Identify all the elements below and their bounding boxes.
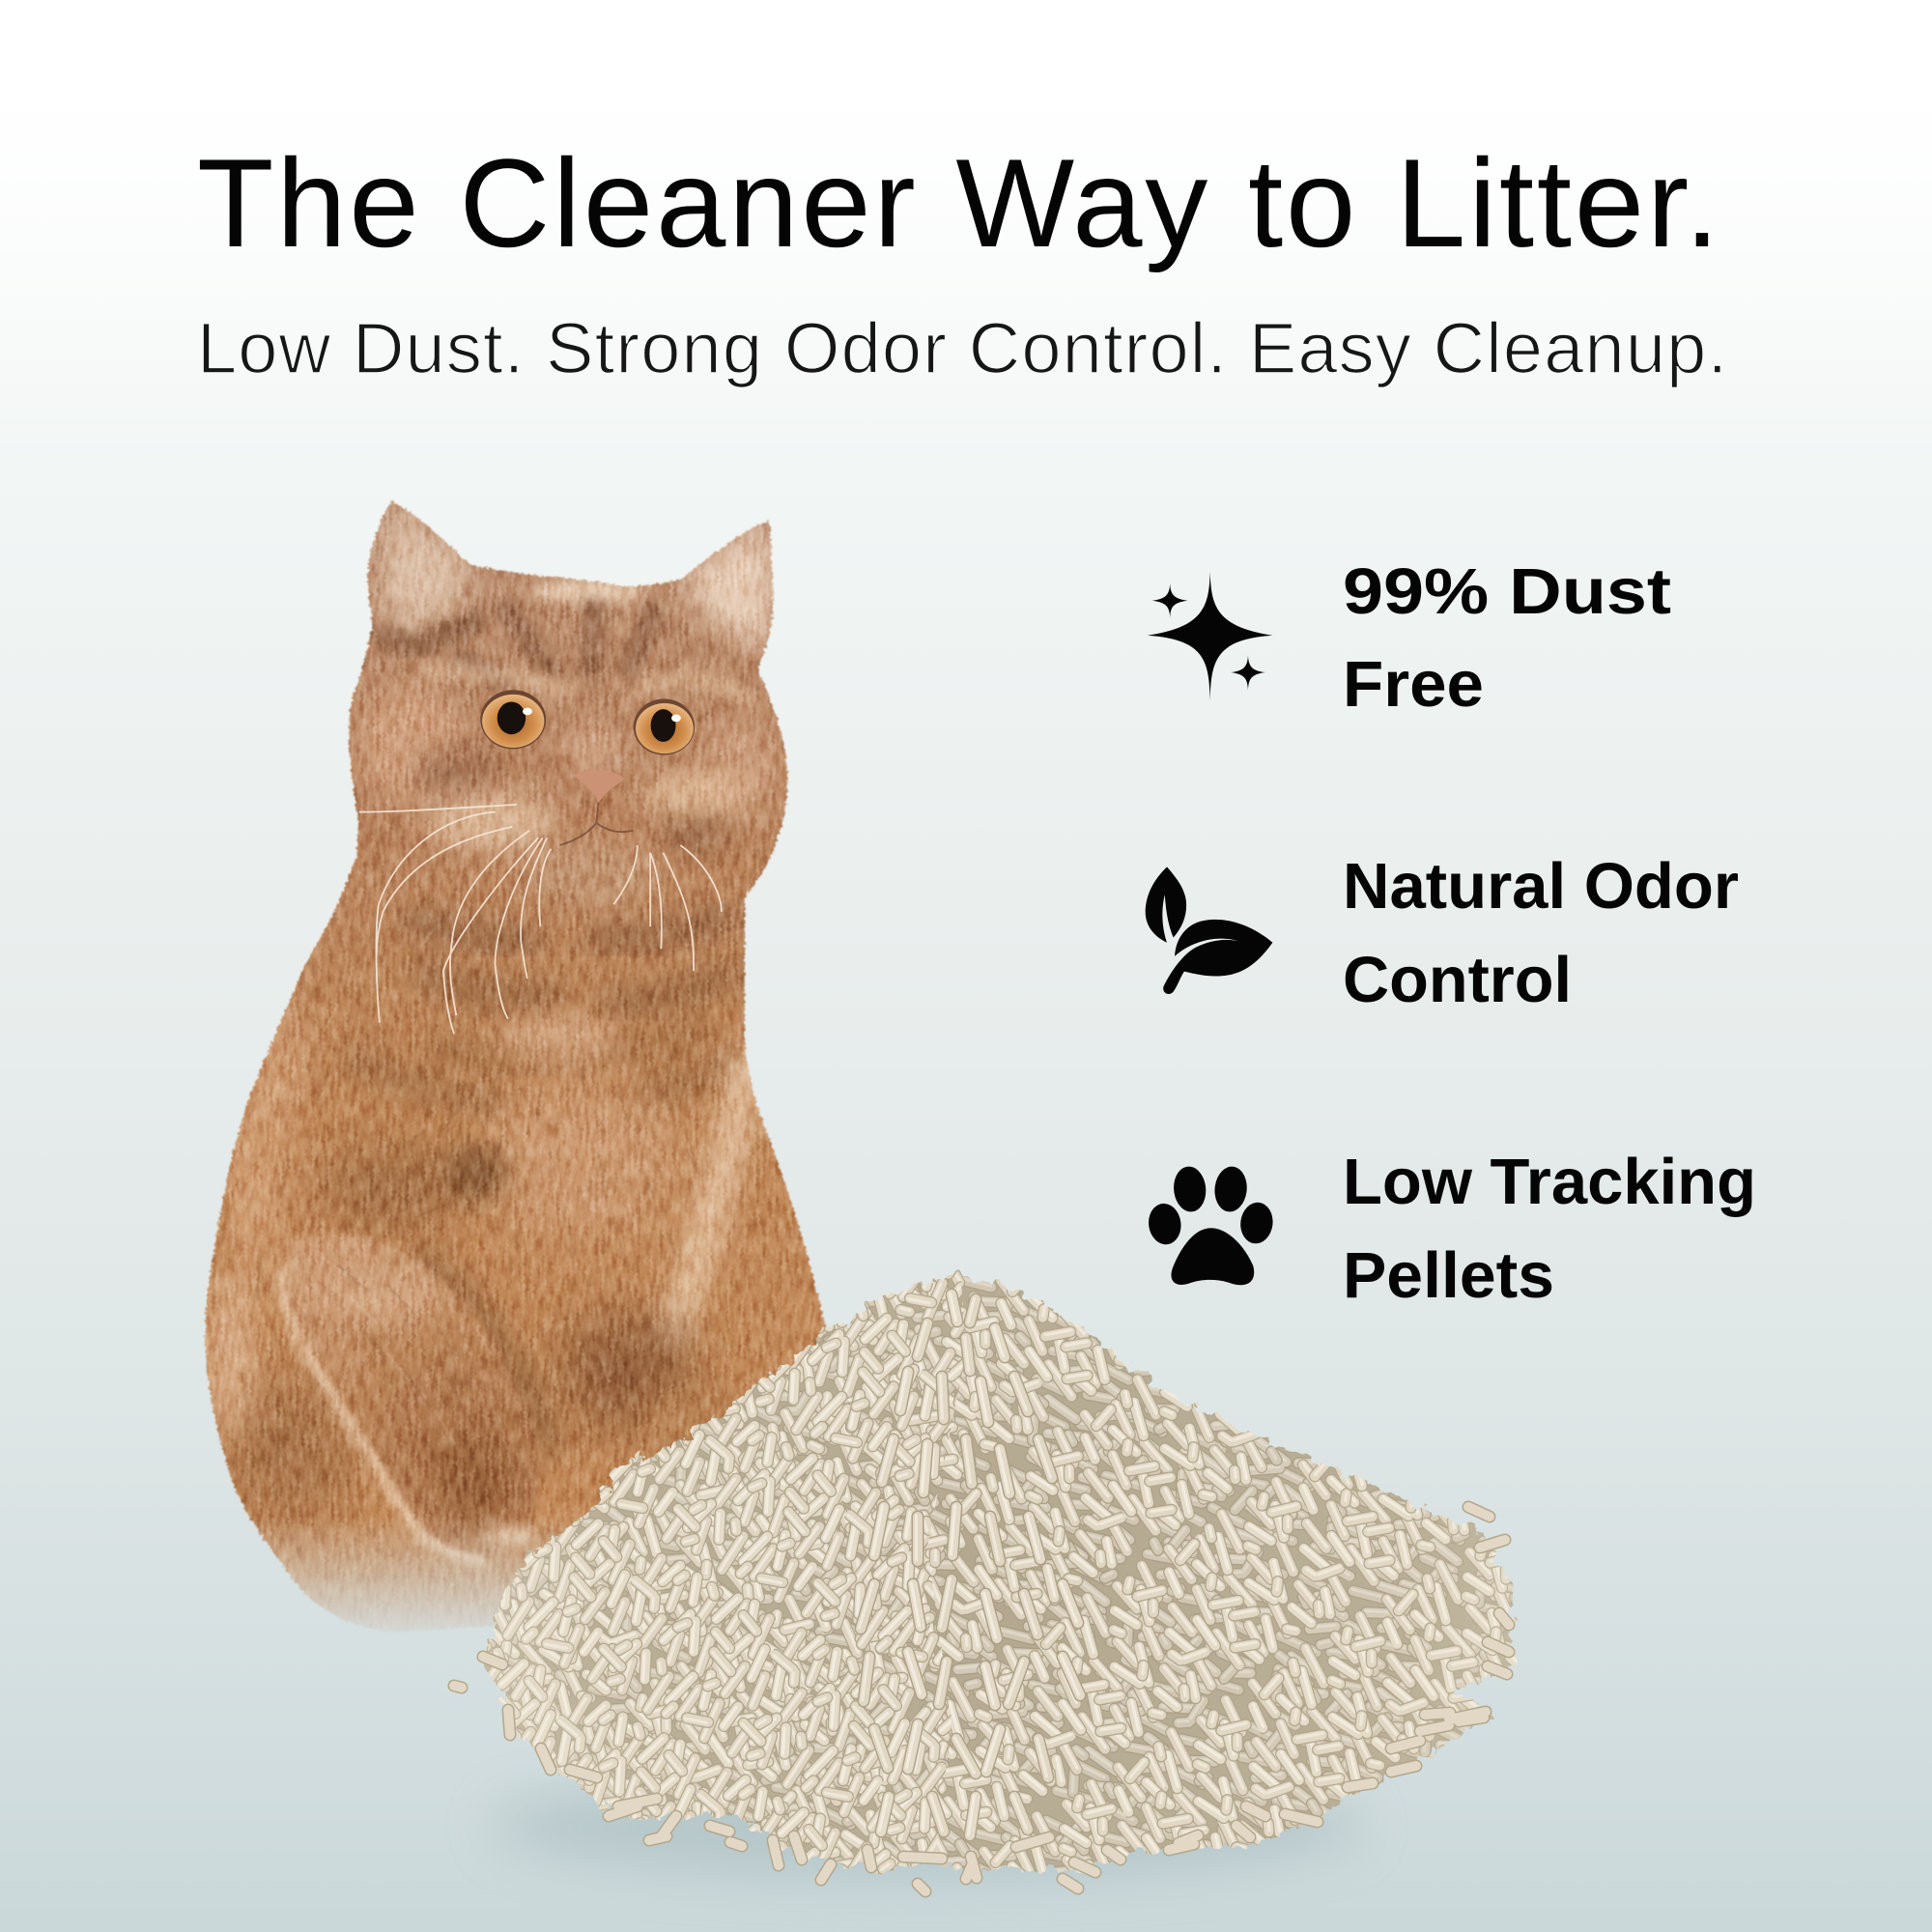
text: Low Tracking Pellets	[1343, 1146, 1756, 1312]
icon: sparkles	[1148, 571, 1272, 700]
title: The Cleaner Way to Litter.	[197, 132, 1719, 273]
front paw	[288, 1234, 540, 1557]
text: Low Tracking Pellets: Low Tracking	[1343, 1146, 1756, 1218]
text: Natural Odor Control: Natural Odor	[1343, 850, 1739, 923]
text: Natural Odor Control	[1343, 850, 1739, 1016]
central vertical pellets	[860, 1293, 1080, 1835]
loose pellets	[454, 1507, 1509, 1891]
face markings	[357, 580, 782, 905]
ear shading	[382, 507, 772, 647]
text: Natural Odor Control: Control	[1343, 944, 1572, 1016]
feature: natural odor control	[1146, 850, 1739, 1016]
right eye	[634, 698, 695, 755]
left eye	[480, 690, 546, 750]
text: 99% Dust Free: Free	[1343, 648, 1484, 721]
text: Low Tracking Pellets: Pellets	[1343, 1239, 1554, 1312]
shadow beside front paw	[415, 1256, 551, 1459]
icon: leaves	[1146, 867, 1272, 994]
feature: low tracking pellets	[1144, 1146, 1756, 1312]
nose and mouth	[559, 770, 633, 845]
illustration: litter pellet pile	[448, 1269, 1519, 1897]
pile shadow	[493, 1772, 1362, 1880]
text: 99% Dust Free: 99% Dust	[1343, 555, 1671, 628]
illustration: orange cat	[203, 499, 827, 1633]
whiskers	[359, 805, 722, 1034]
fur strands	[242, 599, 715, 1501]
fur texture	[205, 501, 824, 1609]
cat face details	[359, 690, 722, 1034]
text: 99% Dust Free	[1343, 555, 1671, 721]
feature: 99% dust free	[1148, 555, 1671, 721]
subtitle: Low Dust. Strong Odor Control. Easy Cleanup.	[197, 308, 1727, 388]
icon: paw print	[1144, 1163, 1277, 1285]
neck stripes	[406, 913, 734, 1062]
chest and flank shading	[211, 1014, 753, 1526]
